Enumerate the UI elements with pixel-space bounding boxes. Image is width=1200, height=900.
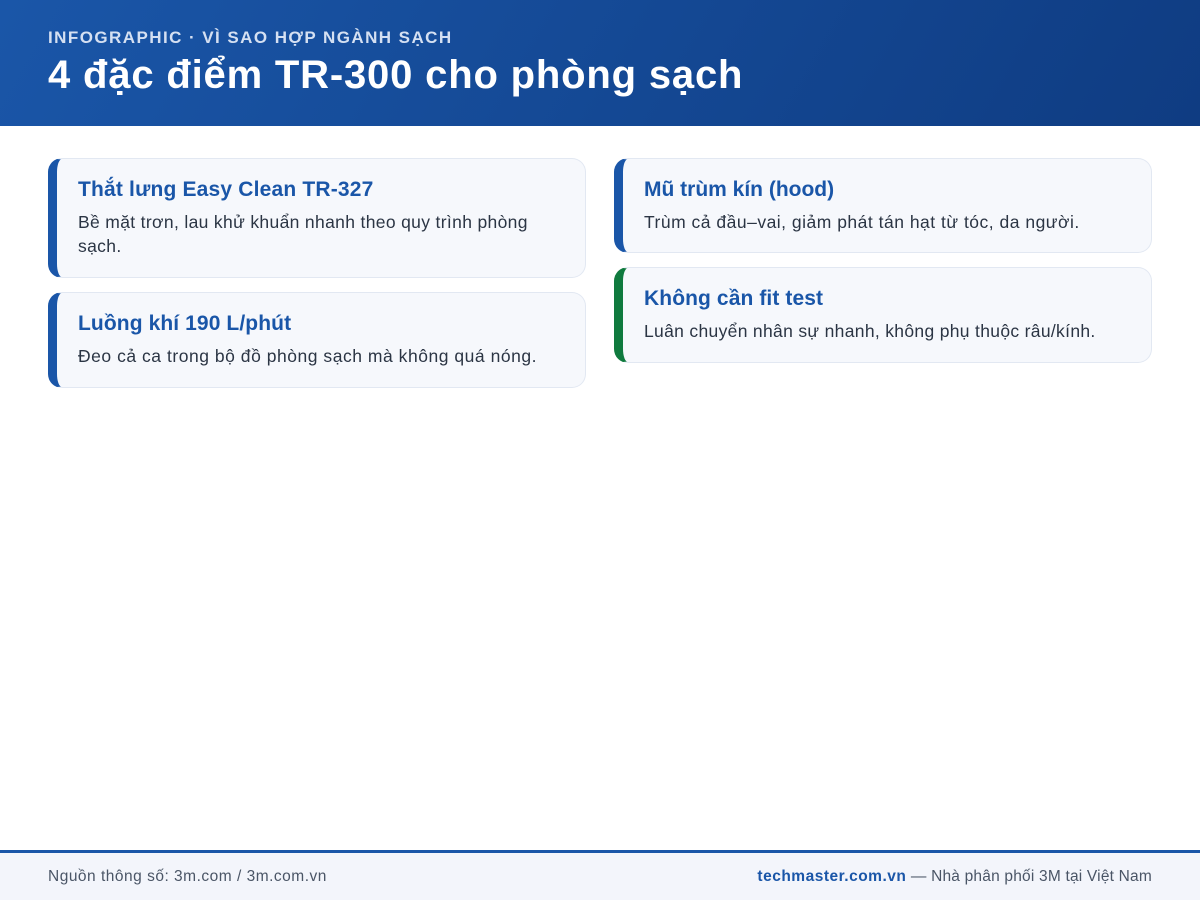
card body: Đeo cả ca trong bộ đồ phòng sạch mà không quá nóng. xyxy=(78,346,537,366)
card: Thắt lưng Easy Clean xyxy=(48,158,586,278)
card body: Bề mặt trơn, lau khử khuẩn nhanh theo quy trình phòng xyxy=(78,212,528,232)
card heading: Không cần fit test xyxy=(644,287,823,310)
card: Luồng khí xyxy=(48,292,586,388)
card: Không cần fit test xyxy=(614,267,1152,363)
title: 4 đặc điểm TR-300 cho phòng sạch xyxy=(48,53,743,97)
card: Mũ trùm kín xyxy=(614,158,1152,253)
header band xyxy=(0,0,1200,126)
card body: Trùm cả đầu–vai, giảm phát tán hạt từ tóc, da người. xyxy=(644,212,1080,232)
card body: sạch. xyxy=(78,236,122,256)
footer band xyxy=(0,850,1200,900)
card heading: Mũ trùm kín (hood) xyxy=(644,178,834,201)
source note: Nguồn thông số: 3m.com / 3m.com.vn xyxy=(48,868,327,885)
card heading: Luồng khí 190 L/phút xyxy=(78,312,291,335)
card heading: Thắt lưng Easy Clean TR-327 xyxy=(78,178,373,201)
kicker: INFOGRAPHIC · VÌ SAO HỢP NGÀNH SẠCH xyxy=(48,28,453,47)
card body: Luân chuyển nhân sự nhanh, không phụ thuộc râu/kính. xyxy=(644,321,1096,341)
distributor credit: techmaster.com.vn — Nhà phân phối 3M tại Việt Nam xyxy=(757,868,1152,885)
card body xyxy=(78,212,528,256)
